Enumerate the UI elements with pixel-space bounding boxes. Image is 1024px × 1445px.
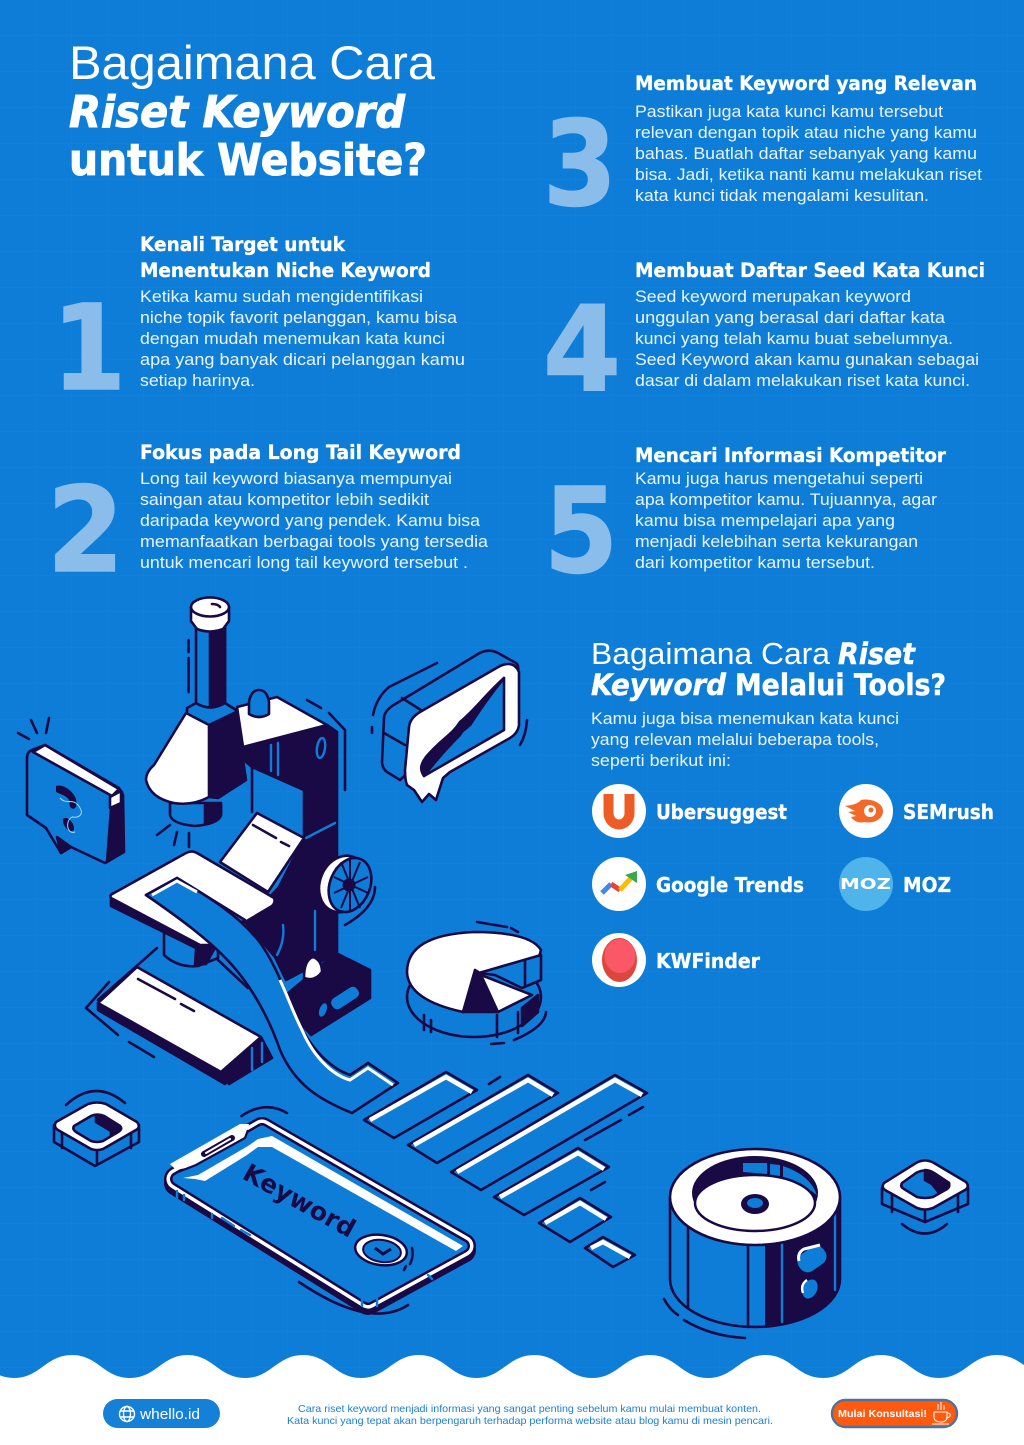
tool: Ubersuggest: Ubersuggest [656, 800, 787, 824]
bar 1 [364, 1072, 477, 1138]
wheel motion lines [345, 887, 375, 925]
top knob [249, 690, 269, 717]
slide plate [220, 813, 304, 892]
bottom knob [304, 957, 322, 979]
step 4 heading: Membuat Daftar Seed Kata Kunci [635, 259, 985, 282]
step 2 [47, 441, 489, 599]
bar 4 [494, 1148, 609, 1215]
step 1 body: niche topik favorit pelanggan, kamu bisa [140, 308, 458, 327]
tools intro text: yang relevan melalui beberapa tools, [591, 730, 879, 749]
step 3 body: relevan dengan topik atau niche yang kamu [635, 123, 977, 142]
tools heading: Keyword [591, 668, 726, 702]
step 5 [544, 444, 946, 600]
icon: question bubble [18, 718, 124, 863]
step 1 [52, 233, 465, 417]
light rays under lens [157, 825, 189, 847]
phone screen [177, 1130, 463, 1298]
stage [110, 852, 275, 945]
footer: website pill [103, 1399, 220, 1428]
step 2 body: saingan atau kompetitor lebih sedikit [140, 490, 429, 509]
screen highlight [183, 1136, 463, 1251]
tools heading [591, 636, 946, 702]
step 5 body: apa kompetitor kamu. Tujuannya, agar [635, 490, 937, 509]
tool: Google Trends [592, 857, 804, 911]
step 4 body: unggulan yang berasal dari daftar kata [635, 308, 946, 327]
stage underside [111, 900, 212, 950]
footer wave [0, 1355, 1024, 1445]
bar 5 [539, 1198, 611, 1242]
microscope head [146, 712, 246, 804]
title: Bagaimana Cara [69, 36, 436, 89]
eyepiece tube [196, 622, 225, 712]
step 3 [543, 72, 982, 233]
step 3 heading: Membuat Keyword yang Relevan [635, 72, 977, 95]
keyword text: Keyword [238, 1158, 361, 1243]
number 1: 1 [52, 279, 126, 417]
footer: note: Kata kunci yang tepat akan berpengaruh terhadap performa website atau blog kamu di mesin pencari. [287, 1415, 773, 1427]
step 2 body [140, 469, 489, 572]
icon: square ring left [54, 1091, 139, 1166]
cylinder motion arcs [664, 1299, 745, 1338]
icon: square ring right [882, 1160, 968, 1234]
bar dashes [489, 1077, 643, 1190]
step 2 body: untuk mencari long tail keyword tersebut . [140, 553, 468, 572]
cylinder inner disc [695, 1175, 815, 1231]
step 1 body: setiap harinya. [140, 371, 255, 390]
step 5 body: menjadi kelebihan serta kekurangan [635, 532, 918, 551]
step 3 body: kata kunci tidak mengalami kesulitan. [635, 186, 929, 205]
step 2 heading: Fokus pada Long Tail Keyword [140, 441, 461, 464]
title [69, 36, 436, 186]
icon: cylinder [664, 1149, 840, 1338]
cylinder top ring [670, 1149, 840, 1245]
tool: MOZ [839, 857, 951, 911]
tools heading: Melalui Tools? [735, 668, 946, 702]
step 4 body: dasar di dalam melakukan riset kata kunci. [635, 371, 970, 390]
tool: KWFinder [592, 933, 760, 987]
footer: note: Cara riset keyword menjadi informasi yang sangat penting sebelum kamu mulai membuat konten. [298, 1403, 761, 1415]
notch [170, 1124, 249, 1170]
phone body [177, 1134, 463, 1302]
tool: SEMrush: SEMrush [903, 800, 994, 824]
phone frame [177, 1130, 463, 1298]
step 1 body [140, 287, 465, 390]
tools intro text [591, 709, 899, 770]
step 2 body: memanfaatkan berbagai tools yang tersedia [140, 532, 489, 551]
step 1 body: apa yang banyak dicari pelanggan kamu [140, 350, 465, 369]
base block [280, 953, 370, 1035]
step 2 body: Long tail keyword biasanya mempunyai [140, 469, 452, 488]
tool: SEMrush [839, 784, 994, 838]
step 4 body: Seed Keyword akan kamu gunakan sebagai [635, 350, 979, 369]
icon: coffee cup [932, 1402, 950, 1424]
side buttons [177, 1191, 432, 1306]
bar 6 [585, 1237, 635, 1267]
step 4 [543, 259, 985, 418]
pedestal [164, 932, 218, 966]
step 3 body: bisa. Jadi, ketika nanti kamu melakukan riset [635, 165, 982, 184]
data ribbon [146, 878, 398, 1113]
step 5 body: kamu bisa mempelajari apa yang [635, 511, 895, 530]
step 1 heading [140, 233, 431, 282]
tools intro text: seperti berikut ini: [591, 751, 731, 770]
number 2: 2 [47, 461, 124, 599]
number 3: 3 [543, 95, 617, 233]
bar chart [364, 1072, 647, 1267]
pie chart [407, 922, 546, 1044]
tools intro text: Kamu juga bisa menemukan kata kunci [591, 709, 899, 728]
footer: website pill: whello.id [139, 1406, 200, 1423]
step 3 body: bahas. Buatlah daftar sebanyak yang kamu [635, 144, 977, 163]
objective lens [170, 803, 221, 826]
footer: note [287, 1403, 773, 1427]
bottom slab [98, 967, 272, 1084]
stage slot [146, 878, 245, 940]
step 5 body: dari kompetitor kamu tersebut. [635, 553, 875, 572]
illustration: microscope [86, 598, 398, 1113]
step 1 heading: Menentukan Niche Keyword [140, 259, 431, 282]
step 4 body: Seed keyword merupakan keyword [635, 287, 911, 306]
eyepiece dashes [189, 640, 345, 790]
icon: smartphone [170, 1107, 463, 1314]
tools heading: Riset [838, 637, 916, 671]
head collar [187, 703, 236, 736]
base plate lines [86, 948, 248, 1057]
step 3 body [635, 102, 982, 205]
number 5: 5 [544, 462, 618, 600]
icon: speech bubble with wave [372, 651, 527, 802]
footer: consult button: Mulai Konsultasi! [838, 1408, 927, 1420]
focus wheel [307, 848, 379, 920]
notch speaker [204, 1138, 232, 1154]
tool: MOZ: MOZ [903, 873, 951, 897]
arm [243, 725, 337, 980]
number 4: 4 [543, 280, 621, 418]
step 1 body: Ketika kamu sudah mengidentifikasi [140, 287, 423, 306]
tools heading: Bagaimana Cara [591, 636, 831, 671]
eyepiece cap [191, 598, 229, 632]
title: untuk Website? [69, 135, 427, 186]
bar 3 [451, 1075, 647, 1190]
step 4 body: kunci yang telah kamu buat sebelumnya. [635, 329, 953, 348]
step 1 heading: Kenali Target untuk [140, 233, 346, 256]
step 5 body [635, 469, 937, 572]
bar 2 [408, 1075, 558, 1163]
tool: Ubersuggest [592, 784, 787, 838]
check button [353, 1232, 409, 1268]
step 1 body: dengan mudah menemukan kata kunci [140, 329, 445, 348]
footer: consult button [832, 1400, 957, 1427]
step 2 body: daripada keyword yang pendek. Kamu bisa [140, 511, 481, 530]
icon: globe [120, 1406, 134, 1422]
cylinder side [670, 1197, 840, 1327]
title: Riset Keyword [69, 87, 405, 138]
cylinder pills [794, 1242, 830, 1301]
step 5 body: Kamu juga harus mengetahui seperti [635, 469, 923, 488]
step 5 heading: Mencari Informasi Kompetitor [635, 444, 946, 467]
tool: Google Trends: Google Trends [656, 873, 804, 897]
step 4 body [635, 287, 979, 390]
step 3 body: Pastikan juga kata kunci kamu tersebut [635, 102, 943, 121]
phone motion arcs [242, 1107, 413, 1314]
tool: KWFinder: KWFinder [656, 949, 760, 973]
tool: MOZ: MOZ [840, 875, 891, 893]
top arm face [237, 697, 327, 747]
